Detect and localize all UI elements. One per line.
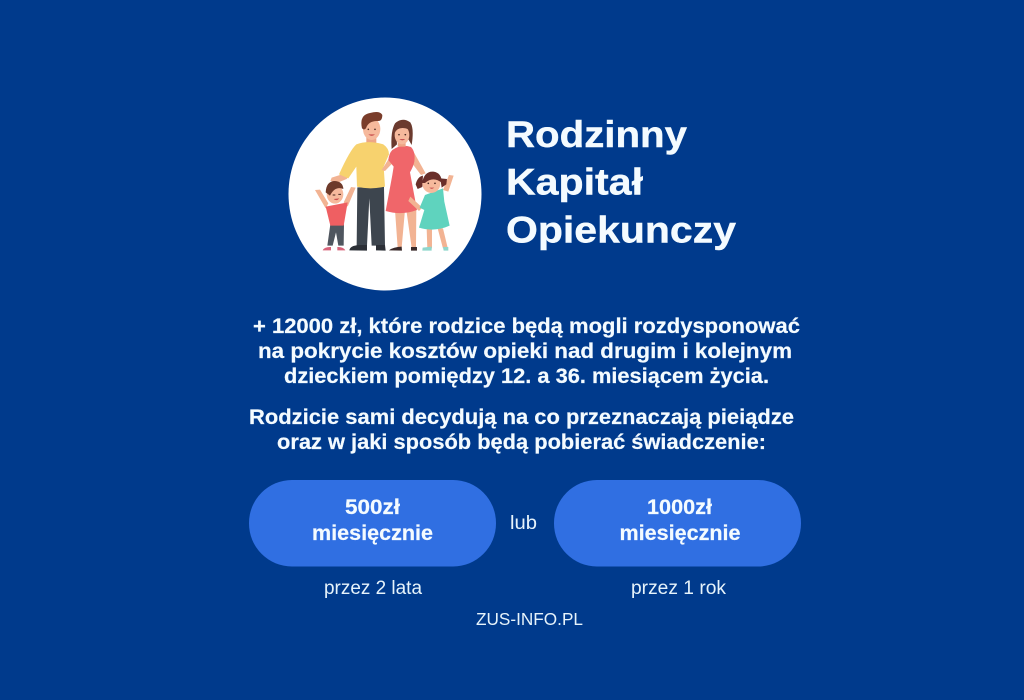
title: Rodzinny (506, 114, 687, 155)
text block: how parents decide (249, 406, 794, 454)
caption: for 2 years: przez 2 lata (324, 578, 422, 599)
icon: girl (408, 172, 454, 251)
title: Kapitał (506, 162, 643, 202)
text block: description: dzieckiem pomiędzy 12. a 36. miesiącem życia. (284, 365, 769, 388)
text block: description: + 12000 zł, które rodzice będą mogli rozdysponować (253, 315, 800, 338)
source label: ZUS-INFO.PL (476, 609, 583, 629)
label: or: lub (510, 513, 537, 534)
option pill: 500 zł monthly: miesięcznie (312, 522, 433, 545)
text block: description: na pokrycie kosztów opieki nad drugim i kolejnym (258, 340, 792, 363)
option pill: 1000 zł monthly: 1000zł (647, 496, 712, 519)
text block: how parents decide: oraz w jaki sposób będą pobierać świadczenie: (277, 431, 766, 454)
illustration: family in white circle (288, 98, 482, 290)
text block: how parents decide: Rodzicie sami decydują na co przeznaczają pieiądze (249, 406, 794, 429)
title: Opiekunczy (506, 210, 736, 250)
option pill: 500 zł monthly (249, 480, 496, 566)
caption: for 1 year: przez 1 rok (631, 578, 727, 599)
option pill: 1000 zł monthly (554, 480, 801, 566)
title (506, 114, 736, 250)
text block: description (253, 315, 800, 388)
option pill: 500 zł monthly: 500zł (345, 496, 400, 519)
option pill: 1000 zł monthly: miesięcznie (620, 522, 740, 545)
icon: mother (382, 120, 426, 251)
icon: boy (315, 181, 356, 250)
icon: father (330, 112, 389, 251)
